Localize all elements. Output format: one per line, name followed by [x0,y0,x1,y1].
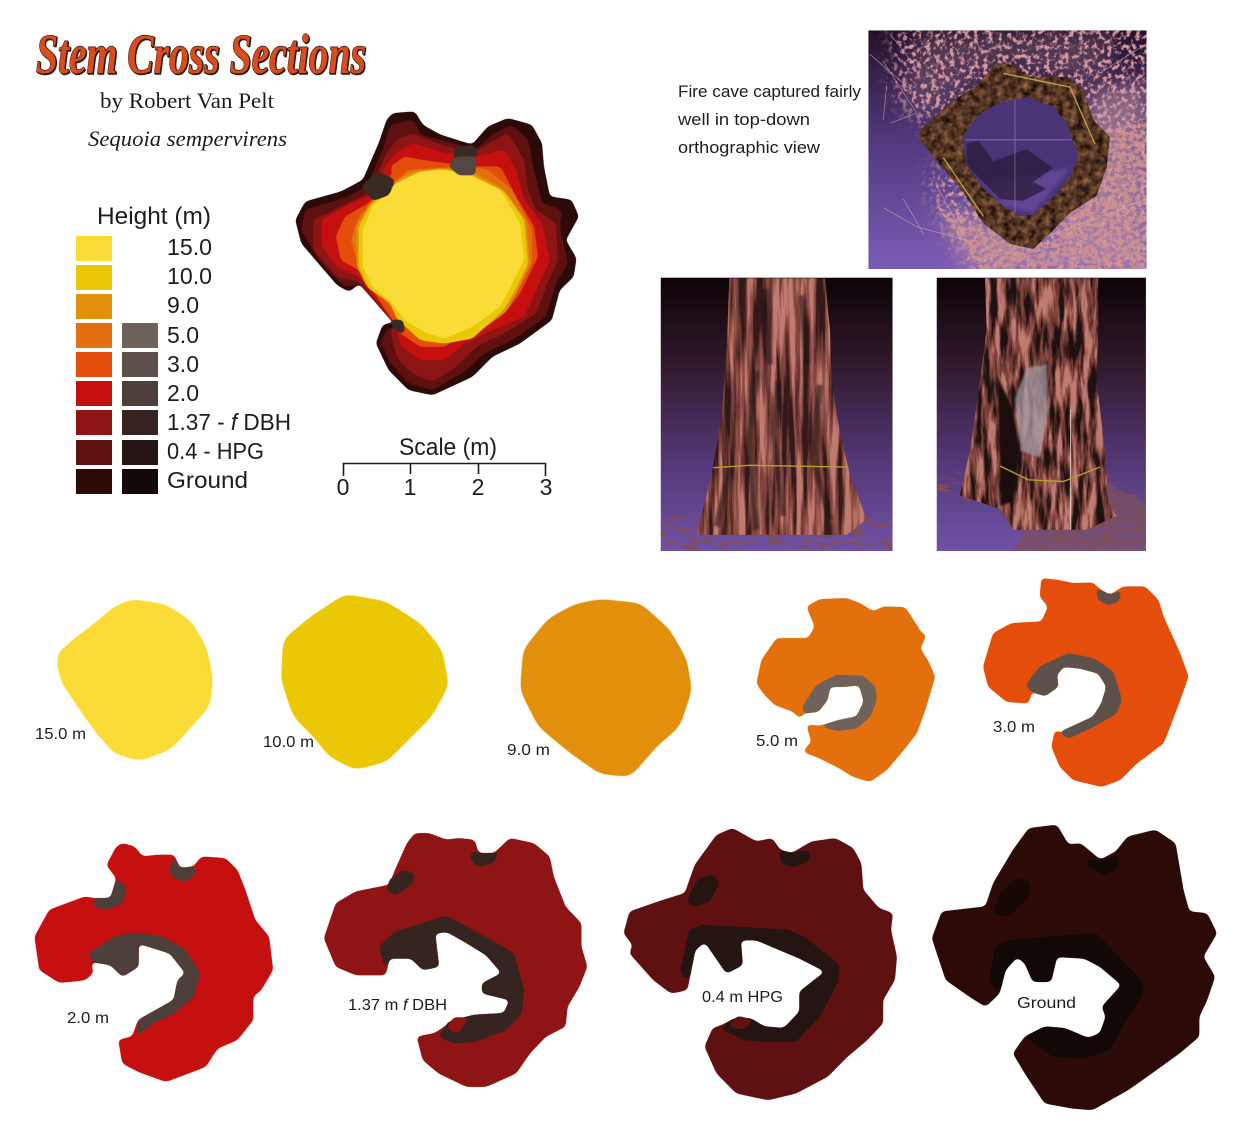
ground [661,509,893,551]
fire cave caption: orthographic view [678,138,821,157]
legend labels: 3.0 [167,351,199,377]
legend: height colours [76,203,291,494]
section: 3.0 m [983,578,1188,787]
legend labels: 10.0 [167,263,212,289]
label: 5.0 m: 5.0 m [756,733,798,750]
cave wall [89,933,200,1037]
bark furrows [717,289,830,530]
section: 2.0 m [35,843,273,1082]
author byline: by Robert Van Pelt [100,88,274,113]
scale bar: 3 [540,474,552,500]
fire cave caption: Fire cave captured fairly [678,82,862,101]
photo: trunk side view left [661,278,893,551]
legend swatches: wood [76,236,112,494]
legend labels: 2.0 [167,380,199,406]
fire cave caption: well in top-down [677,110,810,129]
label: 3.0 m: 3.0 m [993,719,1035,736]
cave wall [379,916,524,1043]
trunk bark [960,278,1117,530]
title: Stem Cross Sections [36,24,366,86]
scale bar: 0 [337,474,349,500]
section: 10.0 m [282,595,448,769]
fire cave caption [677,82,862,157]
section: 9.0 m [521,600,691,776]
label: 2.0 m: 2.0 m [67,1010,109,1027]
legend labels [167,234,291,493]
section: 5.0 m [757,598,935,782]
section: 15.0 m [57,600,212,760]
fire cave opening [997,375,1020,506]
ground [1013,481,1146,551]
cave wall [989,933,1144,1058]
section: ground [932,825,1217,1110]
legend labels: 1.37 - f DBH [167,409,291,435]
photo: trunk side view right [937,278,1146,551]
label: 15.0 m: 15.0 m [35,726,86,743]
legend labels: 5.0 [167,322,199,348]
trunk bark [697,278,867,535]
legend labels: 15.0 [167,234,212,260]
charred ring [920,63,1110,249]
girth tape [713,465,848,468]
mesh seen through cave [967,141,1053,201]
label: 1.37 m fDBH: 1.37 m f DBH [348,997,447,1014]
scale heading: Scale (m) [399,434,497,461]
species name: Sequoia sempervirens [88,126,287,151]
label: 10.0 m: 10.0 m [263,734,314,751]
legend labels: 9.0 [167,292,199,318]
cave wall [803,675,877,731]
legend swatches: fire cave [122,323,158,494]
label: 0.4 m HPG: 0.4 m HPG [702,989,783,1006]
scale bar: 1 [404,474,416,500]
point cloud [868,30,1147,269]
scale bar [337,434,552,500]
legend labels: 0.4 - HPG [167,438,264,464]
photo: top-down view of fire cave [868,30,1147,269]
pale bark patch [1015,364,1048,457]
label: Ground: Ground [1017,995,1076,1012]
cave opening [963,97,1078,216]
composite cross section map [296,112,579,395]
label: 9.0 m: 9.0 m [507,742,550,759]
scale bar: 2 [472,474,484,500]
legend labels: Ground [167,467,248,493]
cave wall [1026,653,1122,738]
legend heading: Height (m) [97,203,211,230]
section: 0.4 m HPG [624,828,897,1100]
section: 1.37 m fDBH [324,833,587,1087]
cave wall [680,925,839,1042]
